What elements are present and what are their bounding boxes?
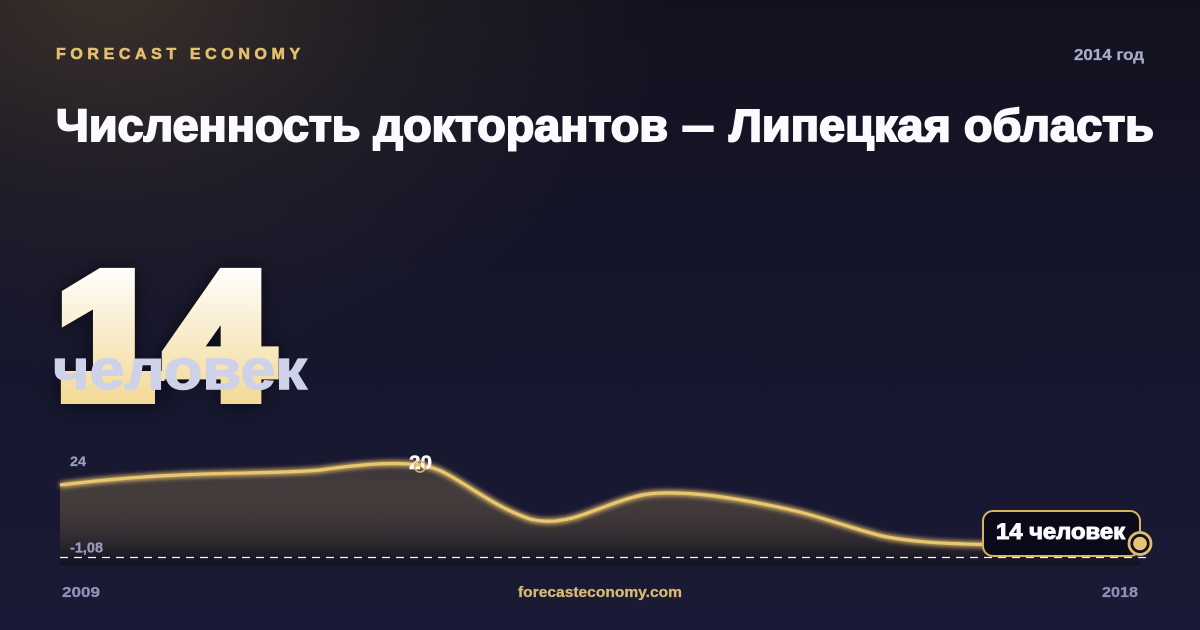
big number: 14: [57, 237, 272, 434]
axis max label: 24: [70, 453, 86, 469]
unit label: человек: [53, 338, 308, 402]
big number: 14: [57, 237, 272, 434]
title: —: [683, 100, 713, 151]
peak marker: [414, 461, 426, 472]
end callout: 14 человек: [996, 519, 1126, 544]
line chart: [60, 453, 1151, 565]
end year: 2018: [1102, 584, 1138, 601]
trend line: [60, 464, 1000, 544]
start year: 2009: [62, 584, 100, 601]
axis min label: -1,08: [70, 540, 103, 556]
end callout: [983, 511, 1140, 556]
end marker: [1129, 532, 1151, 554]
title: [56, 100, 1154, 151]
brand label: FORECAST ECONOMY: [56, 46, 305, 63]
title: Липецкая область: [729, 100, 1154, 151]
line glow: [60, 464, 1000, 544]
baseline dashes: [60, 556, 1146, 558]
area under curve: [60, 464, 1140, 565]
peak value: 20: [409, 453, 432, 474]
year label: 2014 год: [1074, 47, 1144, 64]
title: Численность докторантов: [56, 100, 668, 151]
source url: forecasteconomy.com: [518, 584, 682, 601]
